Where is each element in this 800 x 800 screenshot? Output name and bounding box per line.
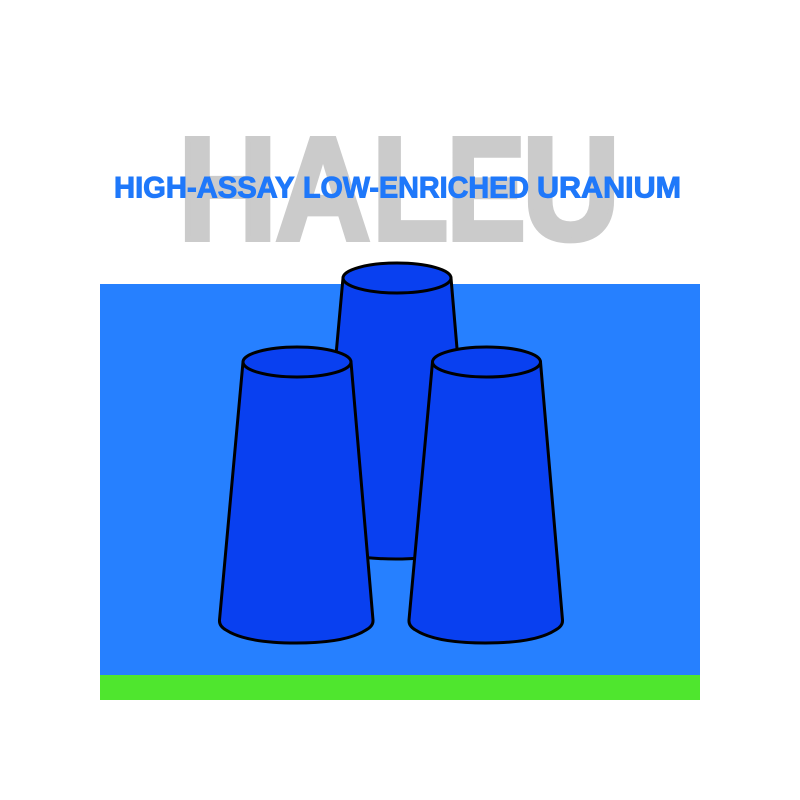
ground: green strip [100, 675, 700, 700]
subtitle: high-assay low-enriched uranium: LOW-ENRICHED [303, 171, 529, 204]
subtitle: high-assay low-enriched uranium: HIGH-ASSAY [114, 171, 295, 204]
title: HALEU: H [178, 107, 277, 270]
icon: right cylinder [409, 347, 563, 643]
subtitle: high-assay low-enriched uranium: URANIUM [537, 171, 681, 204]
title: HALEU: E [447, 107, 526, 270]
title: HALEU: U [522, 107, 620, 270]
icon: left cylinder [219, 347, 373, 643]
title: HALEU: A [276, 107, 370, 270]
panel: blue background [100, 284, 700, 675]
icon: back cylinder [319, 263, 473, 559]
title: HALEU: L [372, 107, 448, 270]
